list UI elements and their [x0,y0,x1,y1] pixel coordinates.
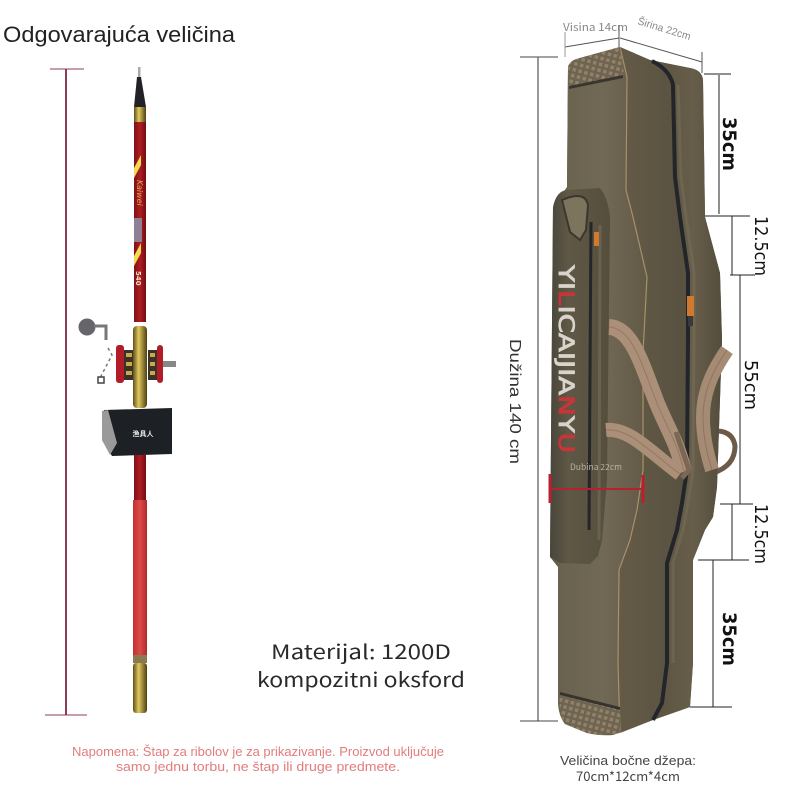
note: samo jednu torbu, ne štap ili druge predmete. [116,759,400,774]
dimension: Širina 22cm [620,14,702,73]
rod clamp box: 渔具人 [132,429,154,439]
width dimension: Dubina 22cm [550,461,643,503]
main zipper [652,61,688,720]
bag body [550,47,722,735]
left panel [558,47,647,734]
dimension: Dužina 140 cm: Dužina 140 cm [506,339,523,464]
pocket logo: YI L ICAIJIA N Y U [554,264,578,453]
dimension: upper 12.5cm: 12.5cm [750,216,771,276]
dimension: top 35cm [704,74,740,214]
material text: kompozitni oksford [257,664,465,693]
fishing rod [78,67,176,713]
grip [133,500,147,655]
main zipper pull [687,296,694,316]
side pocket size caption: 70cm*12cm*4cm [576,766,680,785]
handles [606,327,727,478]
side pocket [550,188,610,564]
dimension: bottom 35cm: 35cm [718,612,740,666]
dimension: Visina 14cm: Visina 14cm [563,19,628,35]
dimension: upper 12.5cm [705,216,771,276]
right panel [650,60,722,720]
dimension: middle 55cm: 55cm [740,360,761,410]
pocket zipper pull [594,232,599,246]
rod bag [550,47,735,735]
middle panel [618,47,688,733]
dimension: top 35cm: 35cm [718,117,740,171]
dimension: lower 12.5cm [698,504,771,564]
width dimension: Dubina 22cm: Dubina 22cm [570,461,622,473]
gold piping [618,47,647,733]
dimension: lower 12.5cm: 12.5cm [750,504,771,564]
rod height dimension line [45,69,87,715]
material text: Materijal: 1200D [271,636,451,665]
note [72,744,444,774]
reel [78,318,176,383]
top reinforced cap [568,47,624,87]
dimension: Širina 22cm: Širina 22cm [636,14,693,43]
note: Napomena: Štap za ribolov je za prikazivanje. Proizvod uključuje [72,744,444,759]
bottom reinforced cap [560,693,620,734]
fishing rod: 540 [134,271,142,286]
dimension: Visina 14cm [563,19,628,57]
side pocket size caption [560,753,696,785]
side pocket size caption: Veličina bočne džepa: [560,753,696,768]
material text [257,636,465,693]
bag right handle back loop [713,431,735,473]
bag zipper stitching [673,85,694,663]
fishing rod: Kaiwei [135,180,144,207]
title: Odgovarajuća veličina [3,22,236,47]
rod clamp box [102,408,172,456]
